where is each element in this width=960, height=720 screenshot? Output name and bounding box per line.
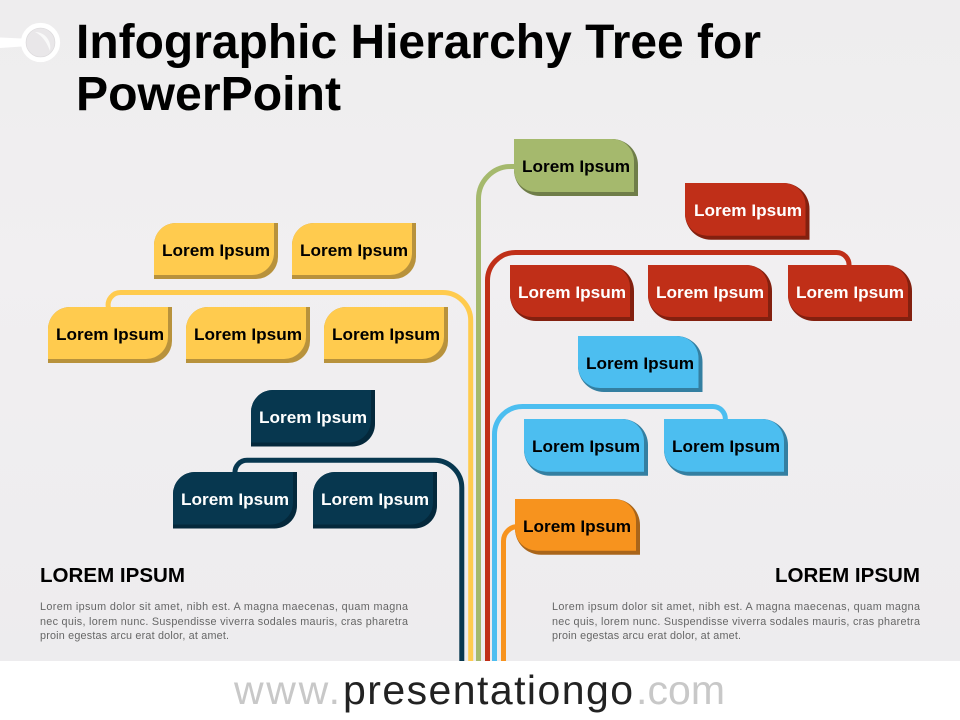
box: navy left <box>173 472 297 528</box>
box: navy left: Lorem Ipsum <box>181 490 289 509</box>
connector: blue <box>494 406 725 661</box>
footer website: .com <box>636 667 725 713</box>
box: blue right <box>664 419 788 476</box>
connector: orange <box>504 526 522 661</box>
heading: left: LOREM IPSUM <box>40 564 185 587</box>
box: navy right <box>313 472 437 528</box>
branch: orange <box>504 499 640 661</box>
branch: red <box>488 183 912 661</box>
footer website: presentationgo <box>343 667 633 713</box>
box: yellow lower middle: Lorem Ipsum <box>194 325 302 344</box>
box: blue left <box>524 419 648 476</box>
icon: pin ring <box>0 25 58 60</box>
title <box>76 16 761 121</box>
box: blue left: Lorem Ipsum <box>532 437 640 456</box>
box: yellow lower right: Lorem Ipsum <box>332 325 440 344</box>
box: yellow top right <box>292 223 416 279</box>
title: PowerPoint <box>76 68 341 121</box>
connector: yellow <box>108 292 471 661</box>
connector: green <box>478 166 518 661</box>
box: orange: Lorem Ipsum <box>523 517 631 536</box>
box: green: Lorem Ipsum <box>522 157 630 176</box>
title: Infographic Hierarchy Tree for <box>76 16 761 69</box>
branch: yellow <box>48 223 471 661</box>
box: yellow top left: Lorem Ipsum <box>162 241 270 260</box>
box: blue top: Lorem Ipsum <box>586 354 694 373</box>
box: yellow top left <box>154 223 278 279</box>
body text: left: nec quis, lorem nunc. Suspendisse viverra sodales mauris, cras pharetra <box>40 616 408 628</box>
box: blue top <box>578 336 702 392</box>
box: red right <box>788 265 912 321</box>
box: yellow lower right <box>324 307 448 363</box>
text block: right <box>552 564 920 642</box>
box: yellow lower middle <box>186 307 310 363</box>
connector: red <box>488 252 849 661</box>
box: blue right: Lorem Ipsum <box>672 437 780 456</box>
body text: left: proin egestas arcu erat dolor, at amet. <box>40 630 229 642</box>
box: navy top: Lorem Ipsum <box>259 408 367 427</box>
branch: green <box>478 139 638 661</box>
box: green <box>514 139 638 196</box>
box: yellow lower left <box>48 307 172 363</box>
body text: right <box>552 601 920 642</box>
heading: right: LOREM IPSUM <box>775 564 920 587</box>
footer website <box>233 667 725 713</box>
box: red left: Lorem Ipsum <box>518 283 626 302</box>
branch: navy <box>173 390 462 661</box>
body text: right: proin egestas arcu erat dolor, at amet. <box>552 630 741 642</box>
branch: blue <box>494 336 788 661</box>
body text: left <box>40 601 408 642</box>
connector: navy <box>235 460 462 661</box>
body text: left: Lorem ipsum dolor sit amet, nibh est. A magna maecenas, quam magna <box>40 601 408 613</box>
box: yellow lower left: Lorem Ipsum <box>56 325 164 344</box>
box: red left <box>510 265 634 321</box>
box: navy right: Lorem Ipsum <box>321 490 429 509</box>
body text: right: Lorem ipsum dolor sit amet, nibh est. A magna maecenas, quam magna <box>552 601 920 613</box>
box: orange <box>515 499 640 555</box>
footer website: www. <box>233 667 340 713</box>
box: red top <box>685 183 810 240</box>
box: red top: Lorem Ipsum <box>694 201 802 220</box>
box: red right: Lorem Ipsum <box>796 283 904 302</box>
body text: right: nec quis, lorem nunc. Suspendisse viverra sodales mauris, cras pharetra <box>552 616 920 628</box>
box: red middle <box>648 265 772 321</box>
text block: left <box>40 564 408 642</box>
box: yellow top right: Lorem Ipsum <box>300 241 408 260</box>
box: navy top <box>251 390 375 446</box>
box: red middle: Lorem Ipsum <box>656 283 764 302</box>
